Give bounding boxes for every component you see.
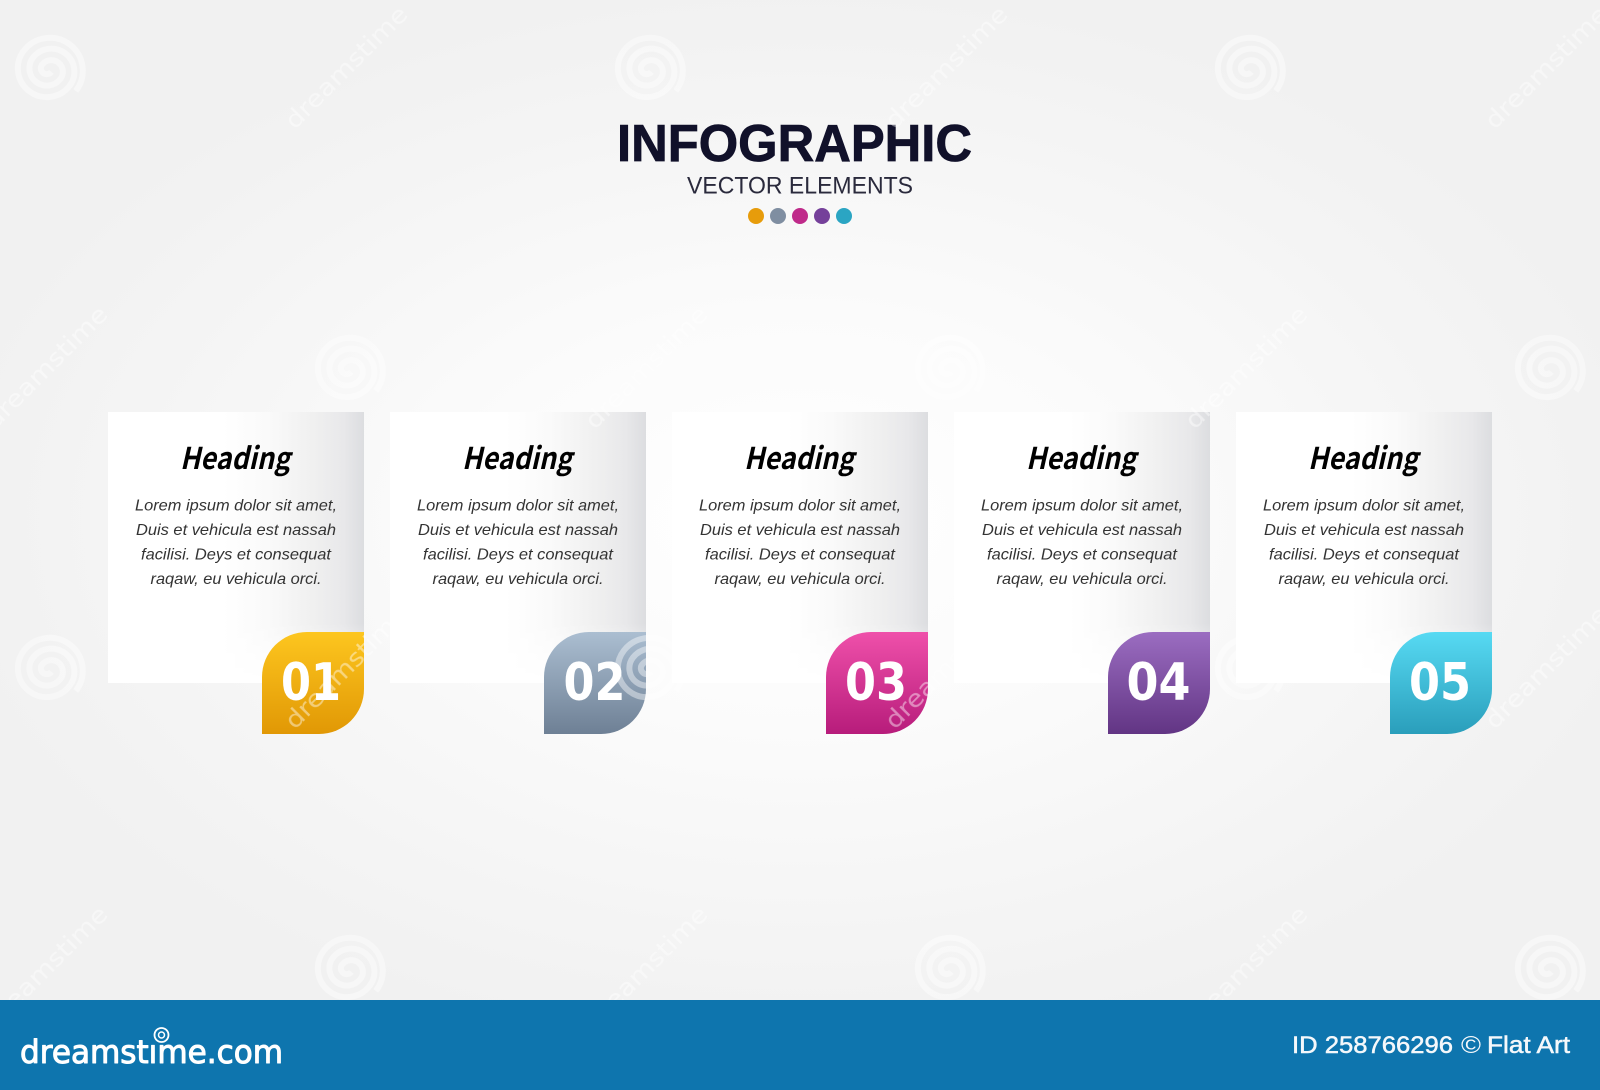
body text 05: facilisi. Deys et consequat [1269,546,1460,564]
footer image id: Flat Art [1487,1032,1570,1059]
heading 02: Heading [462,434,576,478]
body text 01: raqaw, eu vehicula orci. [150,571,322,588]
watermark: diagonal text: dreamstime [279,600,414,735]
panel: step 03 [700,412,928,734]
watermark: diagonal text: dreamstime [279,0,414,135]
body text 04: raqaw, eu vehicula orci. [996,571,1168,588]
body text 03: Duis et vehicula est nassah [700,522,900,539]
body text 03: raqaw, eu vehicula orci. [714,571,886,588]
heading 01: Heading [180,434,294,478]
body text 02: Lorem ipsum dolor sit amet, [417,498,619,514]
number badge 05 [1390,632,1492,734]
subtitle: VECTOR ELEMENTS [687,172,913,200]
body text 04 [981,498,1183,588]
body text 01 [135,498,337,588]
watermark: diagonal text: dreamstime [1179,900,1314,1035]
number badge 01: 01 [281,653,341,713]
number badge 05: 05 [1409,653,1471,713]
footer image id: © [1461,1032,1481,1059]
body text 02: facilisi. Deys et consequat [423,546,614,564]
body text 05: raqaw, eu vehicula orci. [1278,571,1450,588]
watermark: diagonal text: dreamstime [879,600,1014,735]
body text 04: Duis et vehicula est nassah [982,522,1182,539]
footer bar [0,1000,1600,1090]
body text 01: Lorem ipsum dolor sit amet, [135,498,337,514]
body text 05 [1263,498,1465,588]
body text 04: Lorem ipsum dolor sit amet, [981,498,1183,514]
body text 04: facilisi. Deys et consequat [987,546,1178,564]
number badge 03: 03 [845,653,907,713]
body text 02: raqaw, eu vehicula orci. [432,571,604,588]
watermark: diagonal text: dreamstime [1179,300,1314,435]
body text 03: Lorem ipsum dolor sit amet, [699,498,901,514]
footer image id: ID 258766296 [1292,1032,1453,1059]
panel: step 05 [1264,412,1492,734]
watermark: diagonal text: dreamstime [879,0,1014,135]
heading 04: Heading [1026,434,1140,478]
title block [617,115,972,224]
body text 01: Duis et vehicula est nassah [136,522,336,539]
number badge 04: 04 [1126,653,1190,713]
panel: step 04 [982,412,1210,734]
watermark: diagonal text: dreamstime [1479,600,1600,735]
number badge 02 [544,632,646,734]
number badge 01 [262,632,364,734]
watermark: diagonal text: dreamstime [579,900,714,1035]
panel: step 02 [418,412,646,734]
watermark: diagonal text: dreamstime [1479,0,1600,135]
number badge 02: 02 [564,653,626,713]
body text 03: facilisi. Deys et consequat [705,546,896,564]
body text 05: Duis et vehicula est nassah [1264,522,1464,539]
body text 03 [699,498,901,588]
heading 05: Heading [1308,434,1422,478]
footer image id [1292,1032,1570,1059]
body text 02: Duis et vehicula est nassah [418,522,618,539]
watermark: spirals [615,635,646,700]
body text 01: facilisi. Deys et consequat [141,546,332,564]
watermark: diagonal text: dreamstime [579,300,714,435]
number badge 04 [1108,632,1210,734]
footer logo: dreamstıme.com [20,1033,283,1071]
colour dots [748,208,852,224]
body text 05: Lorem ipsum dolor sit amet, [1263,498,1465,514]
title: INFOGRAPHIC [617,115,972,173]
number badge 03 [826,632,928,734]
panel: step 01 [108,412,364,734]
body text 02 [417,498,619,588]
heading 03: Heading [744,434,858,478]
watermark: diagonal text [288,124,1210,728]
